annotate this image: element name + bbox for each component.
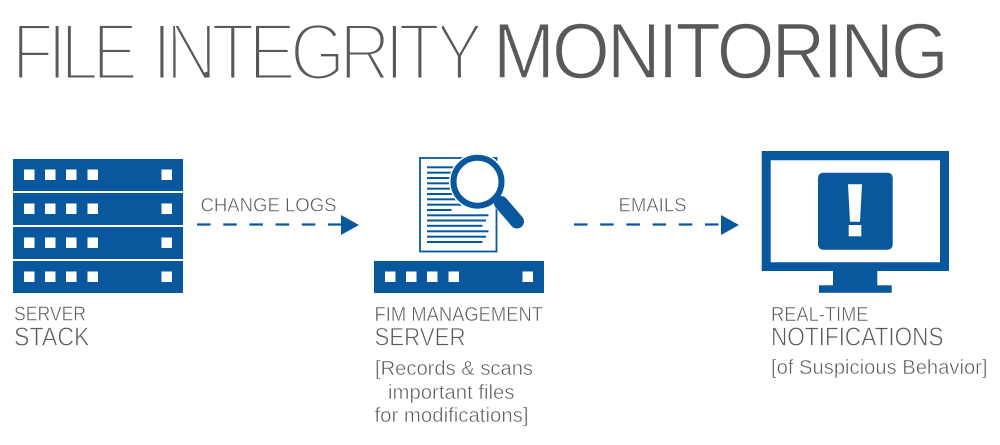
label: FIM management server <box>374 303 543 352</box>
label: FIM management server: SERVER <box>374 324 466 352</box>
icon: monitor with alert <box>762 151 949 293</box>
label: server stack <box>14 302 90 352</box>
arrow: emails <box>574 215 739 235</box>
icon: server stack <box>13 159 183 293</box>
title <box>12 6 946 98</box>
text: FIM server description: [Records & scans <box>375 358 533 380</box>
label: real-time notifications <box>771 303 944 352</box>
label: emails: EMAILS <box>618 196 686 216</box>
title: MONITORING <box>493 6 946 95</box>
label: change logs: CHANGE LOGS <box>200 196 336 216</box>
text: FIM server description: important files <box>388 382 514 404</box>
arrow: change logs <box>197 215 359 235</box>
icon: FIM management server <box>374 261 544 293</box>
text: notifications description: [of Suspicious Behavior] <box>771 357 988 379</box>
icon: document with magnifying glass <box>420 153 517 252</box>
title: FILE <box>12 8 135 98</box>
label: real-time notifications: NOTIFICATIONS <box>771 324 944 352</box>
label: FIM management server: FIM MANAGEMENT <box>374 303 543 326</box>
label: server stack: SERVER <box>14 302 86 326</box>
title: INTEGRITY <box>152 8 482 98</box>
text: FIM server description <box>374 358 533 427</box>
label: server stack: STACK <box>14 324 90 352</box>
text: FIM server description: for modifications] <box>374 405 528 427</box>
label: real-time notifications: REAL-TIME <box>771 303 868 326</box>
